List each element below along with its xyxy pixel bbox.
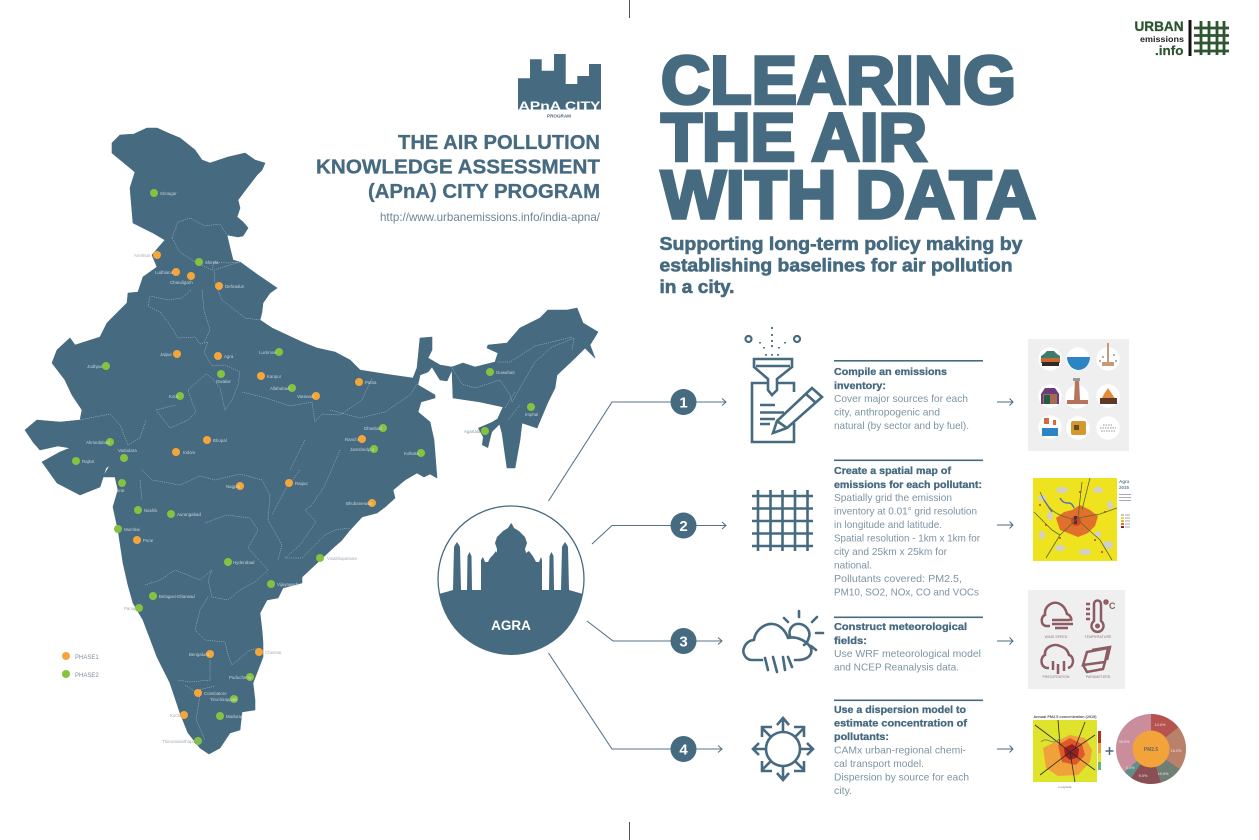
chart: PM2.5 source donut [1116, 714, 1186, 784]
city labels: Mumbai [124, 527, 140, 532]
city labels: Guwahati [496, 370, 515, 375]
city labels: Chennai [265, 650, 281, 655]
subtitle: Supporting long-term policy making by [660, 233, 1023, 254]
icon: stacked layers [1083, 647, 1110, 672]
title: WITH DATA [661, 157, 1036, 233]
city labels: Thiruvananthapuram [162, 739, 203, 744]
chart: PM2.5 source donut: 14.0% [1155, 723, 1166, 727]
city labels: Patna [365, 380, 377, 385]
connector lines [548, 398, 726, 752]
step 1 text: city, anthropogenic and [834, 408, 940, 418]
step 3 text [834, 616, 983, 674]
chart: PM2.5 source donut: 33.0% [1119, 740, 1130, 744]
city labels: Amritsar [134, 253, 151, 258]
icon: fire [1100, 388, 1117, 404]
city labels: Kolkata [404, 451, 419, 456]
chart: PM2.5 source donut: 16.0% [1171, 749, 1182, 753]
city markers: phase 2 [72, 189, 535, 745]
chart legend [1119, 479, 1131, 528]
city labels: Kochi [170, 713, 181, 718]
icon: chimney [1067, 378, 1088, 404]
city labels: Chandigarh [170, 280, 193, 285]
city labels: Ludhiana [155, 270, 174, 275]
circle: Agra with Taj Mahal [438, 506, 584, 655]
city labels: Kanpur [267, 374, 282, 379]
step 1 text: natural (by sector and by fuel). [834, 421, 969, 432]
step 1 text [834, 360, 983, 432]
city labels [82, 191, 538, 744]
icon: dispersion arrows [753, 718, 813, 780]
chart legend: Agra [1119, 479, 1130, 484]
city labels: Vadodara [118, 448, 137, 453]
step 2 text: city and 25km x 25km for [834, 547, 948, 558]
step 2 text: Spatially grid the emission [834, 493, 952, 504]
chart: concentration map: Longitude [1058, 785, 1072, 789]
chart: PM2.5 source donut: 3.0% [1126, 766, 1135, 770]
city labels: Imphal [525, 412, 538, 417]
map: state borders [80, 218, 574, 740]
city labels: Rajkot [82, 459, 95, 464]
icon: thermometer: C [1109, 601, 1116, 611]
step 2 text: in longitude and latitude. [834, 520, 942, 531]
logo: urban emissions [1134, 19, 1229, 58]
icon: rain cloud [1041, 645, 1073, 674]
panel: meteorological parameters: PRECIPITATION [1042, 675, 1070, 679]
logo: APnA City program: APnA CITY [518, 101, 601, 113]
icon: funnel, document and pencil [746, 327, 822, 442]
city labels: Agra [224, 354, 234, 359]
step 4 text: pollutants: [834, 732, 889, 743]
heading: program name: THE AIR POLLUTION [398, 131, 600, 154]
step 4 text: CAMx urban-regional chemi- [834, 746, 966, 756]
city labels: Bhopal [213, 438, 227, 443]
city labels: Lucknow [259, 350, 277, 355]
icon: waste dots [1100, 425, 1116, 431]
heading: program name [316, 131, 600, 203]
city labels: Kota [169, 394, 179, 399]
chart: concentration map [1033, 715, 1101, 789]
panel: meteorological parameters: PARAMETERS [1086, 675, 1111, 679]
icon: water [1067, 357, 1090, 370]
city labels: Ranchi [345, 437, 359, 442]
logo: urban emissions: URBAN [1134, 19, 1184, 34]
icon: house [1041, 388, 1059, 404]
city markers: phase 1 [133, 251, 376, 719]
city labels: Ahmedabad [86, 440, 110, 445]
step 4 number: 4 [679, 742, 688, 758]
city labels: Nagpur [226, 484, 241, 489]
icon: car [1041, 351, 1060, 366]
chart legend: 2015 [1119, 485, 1130, 490]
step 3 text: and NCEP Reanalysis data. [834, 662, 959, 674]
arrow: step 2 [997, 522, 1013, 528]
map of India with study cities [25, 128, 598, 754]
city labels: Bhubaneswar [346, 501, 373, 506]
step 4 text: cal transport model. [834, 759, 924, 770]
step 2 text: PM10, SO2, NOx, CO and VOCs [834, 588, 979, 598]
chart: PM2.5 source donut: 9.0% [1139, 774, 1148, 778]
step 2 text [834, 460, 983, 598]
city labels: Madurai [226, 714, 242, 719]
city labels: Raipur [295, 481, 308, 486]
title: THE AIR [661, 100, 927, 176]
step 3 number [670, 628, 696, 654]
city labels: Surat [114, 488, 125, 493]
chord fill [439, 594, 583, 655]
chart: PM2.5 source donut: PM2.5 [1144, 747, 1158, 753]
step 3 text: Use WRF meteorological model [834, 649, 981, 660]
arrow: step 3 [997, 638, 1013, 644]
step 3 text: Construct meteorological [834, 622, 967, 633]
arrow: step 1 [997, 398, 1013, 406]
icon: industry [1042, 418, 1058, 436]
program url: http://www.urbanemissions.info/india-apna/ [380, 210, 601, 224]
step 4 text: estimate concentration of [834, 718, 968, 730]
city labels: Hyderabad [233, 560, 255, 565]
city labels: Jamshedpur [350, 447, 375, 452]
chart: Agra emissions map [1033, 478, 1131, 561]
subtitle: establishing baselines for air pollution [660, 254, 1012, 276]
city labels: Srinagar [160, 191, 177, 196]
city labels: Indore [183, 450, 196, 455]
city labels: Shimla [205, 260, 219, 265]
city labels: Dehradun [225, 284, 245, 289]
city labels: Nashik [144, 508, 158, 513]
city labels: Coimbatore [204, 691, 227, 696]
city labels: Bengaluru [189, 652, 210, 657]
step 1 text: inventory: [834, 381, 886, 392]
icon: grid [752, 490, 813, 551]
title [661, 42, 1036, 233]
panel: emission sources [1028, 339, 1129, 451]
step 4 text: Dispersion by source for each [834, 772, 969, 784]
city labels: Gwalior [216, 379, 231, 384]
logo: urban emissions: emissions [1140, 34, 1184, 44]
heading: program name: (APnA) CITY PROGRAM [368, 180, 600, 203]
icon: generator [1071, 421, 1086, 435]
city labels: Jodhpur [87, 364, 103, 369]
city labels: Dhanbad [364, 426, 382, 431]
chart: PM2.5 source donut: 10.0% [1158, 772, 1169, 776]
step 1 number: 1 [679, 394, 688, 412]
step 1 text: Cover major sources for each [834, 394, 968, 405]
city labels: Tiruchirappalli [210, 697, 237, 702]
title: CLEARING [661, 42, 1016, 118]
icon: wind cloud [1042, 603, 1073, 628]
map: Tripura [478, 417, 500, 448]
city labels: Visakhapatnam [327, 556, 358, 561]
city labels: Aurangabad [177, 512, 201, 517]
logo: APnA City program: PROGRAM [547, 114, 571, 118]
city labels: Belagavi-Dharwad [159, 594, 195, 599]
step 2 text: emissions for each pollutant: [834, 480, 982, 491]
city labels: Panaji [124, 606, 136, 611]
step 4 text [834, 700, 983, 797]
panel: meteorological parameters: TEMPERATURE [1085, 635, 1112, 639]
legend: PHASE2 [75, 673, 99, 679]
city labels: Puducherry [229, 675, 252, 680]
step 2 text: Spatial resolution - 1km x 1km for [834, 534, 981, 544]
step 3 text: fields: [834, 636, 867, 647]
heading: program name: KNOWLEDGE ASSESSMENT [316, 156, 600, 178]
step 3 number: 3 [679, 634, 688, 650]
step 4 number [670, 736, 696, 762]
panel: meteorological parameters: WIND SPEED [1045, 635, 1068, 639]
step 4 text: city. [834, 786, 852, 797]
step 2 text: Create a spatial map of [834, 466, 952, 477]
logo: APnA City program [518, 54, 601, 118]
label: Agra: AGRA [491, 618, 531, 633]
panel: meteorological parameters [1028, 590, 1125, 689]
subtitle: in a city. [660, 276, 734, 297]
arrow: step 4 [997, 746, 1013, 752]
step 2 number: 2 [679, 518, 688, 535]
icon: cloud, sun and rain [743, 611, 823, 672]
logo: urban emissions: .info [1155, 44, 1184, 58]
icon: Taj Mahal [439, 523, 583, 594]
plus sign [1106, 747, 1114, 755]
city labels: Agartala [464, 429, 481, 434]
city labels: Jaipur [160, 352, 172, 357]
step 1 number [670, 389, 696, 415]
legend [62, 652, 99, 679]
icon: road dust broom [1099, 343, 1117, 366]
city labels: Pune [143, 538, 154, 543]
legend: PHASE1 [75, 655, 99, 661]
step 2 text: inventory at 0.01° grid resolution [834, 506, 977, 518]
subtitle [660, 233, 1023, 297]
step 2 text: national. [834, 560, 872, 572]
step 1 text: Compile an emissions [834, 367, 947, 378]
chart: concentration map: Annual PM2.5 concentration (2015) [1033, 715, 1097, 719]
step 2 text: Pollutants covered: PM2.5, [834, 574, 962, 585]
map: country shape [25, 128, 598, 754]
color scale [1098, 731, 1101, 770]
step 4 text: Use a dispersion model to [834, 705, 966, 716]
city labels: Allahabad [270, 386, 290, 391]
step 2 number [670, 512, 696, 538]
city labels: Vijayawada [277, 582, 300, 587]
city labels: Varanasi [297, 394, 314, 399]
